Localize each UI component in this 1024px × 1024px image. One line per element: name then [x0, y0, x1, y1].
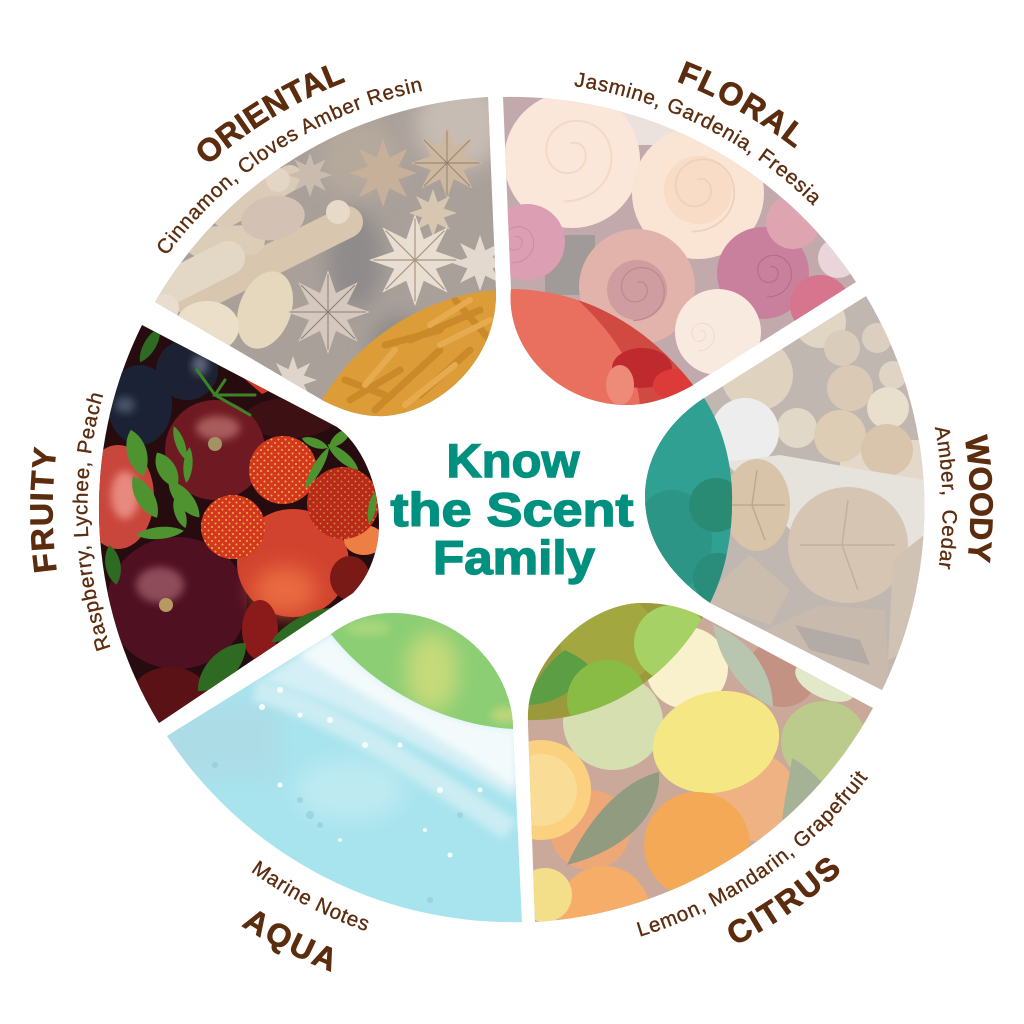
label: oriental: ORIENTAL [197, 65, 346, 162]
photo: citrus fruit [528, 603, 873, 922]
label: fruity: Raspberry, Lychee, Peach [72, 393, 110, 652]
photo: water [160, 610, 530, 930]
panel: aqua [160, 610, 530, 930]
photo: fruit [98, 325, 379, 723]
accent: green wash [331, 613, 513, 729]
accent: red rose [510, 289, 693, 405]
label: woody: WOODY [965, 434, 994, 564]
label: citrus: CITRUS [728, 858, 840, 942]
label: fruity [30, 393, 110, 652]
title [390, 434, 634, 584]
label: aqua: Marine Notes [252, 860, 368, 930]
accent: green overlay [528, 603, 703, 720]
label: woody: Amber, Cedar [934, 427, 958, 570]
panel: citrus [528, 603, 873, 922]
title: Family [433, 531, 595, 584]
accent: teal [645, 398, 732, 603]
label: floral: Jasmine, Gardenia, Freesia [574, 72, 818, 206]
panel: woody [632, 290, 930, 700]
panel: fruity [98, 325, 379, 723]
panel: oriental [155, 97, 496, 416]
title: the Scent [390, 483, 634, 536]
label: floral: FLORAL [678, 61, 799, 148]
label: aqua [241, 860, 368, 972]
label: woody [934, 427, 994, 570]
title: Know [446, 434, 580, 487]
label: fruity: FRUITY [30, 446, 57, 572]
photo: spices [155, 97, 496, 416]
label: citrus: Lemon, Mandarin, Grapefruit [636, 771, 868, 936]
label: aqua: AQUA [241, 911, 332, 972]
label: oriental: Cinnamon, Cloves Amber Resin [158, 79, 422, 253]
photo: logs [640, 290, 930, 700]
panel: floral [503, 96, 856, 405]
photo: roses [503, 96, 856, 405]
accent: orange cloves [320, 285, 500, 420]
